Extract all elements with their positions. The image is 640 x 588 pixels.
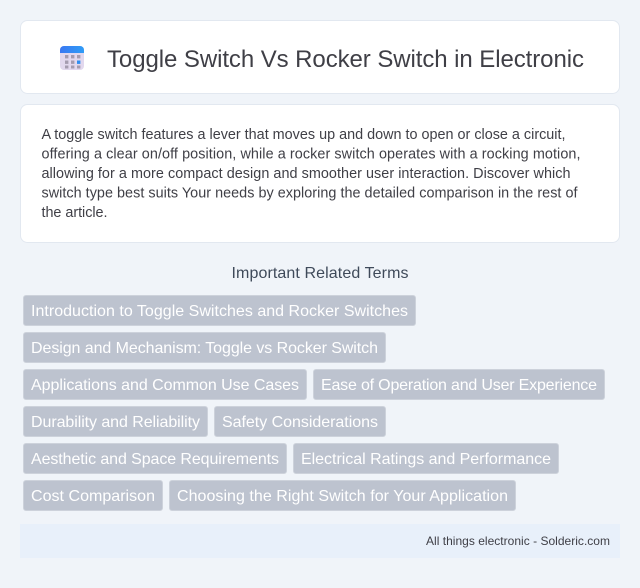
tag: choosing the right switch (170, 480, 516, 510)
tag: ease of operation: Ease of Operation and User Experience (321, 377, 597, 394)
tag: durability: Durability and Reliability (31, 414, 200, 431)
footer: All things electronic - Solderic.com (426, 534, 610, 548)
tag: design and mechanism: Design and Mechanism: Toggle vs Rocker Switch (31, 340, 378, 357)
tag: safety: Safety Considerations (222, 414, 378, 431)
title: Toggle Switch Vs Rocker Switch in Electronic (107, 46, 584, 73)
tag: safety (214, 406, 386, 436)
tag: cost comparison (24, 480, 162, 510)
tag: introduction: Introduction to Toggle Switches and Rocker Switches (31, 303, 408, 320)
tag: cost comparison: Cost Comparison (31, 488, 155, 505)
tag: electrical ratings (294, 444, 558, 474)
tag: introduction (24, 296, 416, 326)
text block: introduction paragraph: the article. (42, 205, 108, 221)
tag: applications: Applications and Common Use Cases (31, 377, 299, 394)
tag: ease of operation (314, 370, 604, 400)
text block: introduction paragraph: switch type best suits Your needs by exploring the detailed comparison in the rest of (42, 186, 578, 202)
heading: important related terms: Important Related Terms (232, 265, 408, 282)
text block: introduction paragraph: allowing for a more compact design and smoother user interaction. Discover which (42, 166, 570, 182)
tag: aesthetic (24, 444, 286, 474)
tag: applications (24, 370, 306, 400)
text block: introduction paragraph: offering a clear on/off position, while a rocker switch operates with a rocking motion, (42, 146, 580, 162)
tag: choosing the right switch: Choosing the Right Switch for Your Application (177, 488, 508, 505)
tag: aesthetic: Aesthetic and Space Requirements (31, 451, 279, 468)
tag: design and mechanism (24, 332, 386, 362)
tags: related terms (24, 296, 604, 510)
text block: introduction paragraph: A toggle switch features a lever that moves up and down to open or close a circuit, (42, 127, 566, 143)
text block: introduction paragraph (42, 127, 580, 221)
tag: durability (24, 406, 208, 436)
footer (20, 524, 620, 558)
panel: introduction (20, 104, 620, 242)
panel: header (20, 20, 620, 94)
icon: calendar grid (60, 46, 84, 70)
tag: electrical ratings: Electrical Ratings and Performance (301, 451, 551, 468)
